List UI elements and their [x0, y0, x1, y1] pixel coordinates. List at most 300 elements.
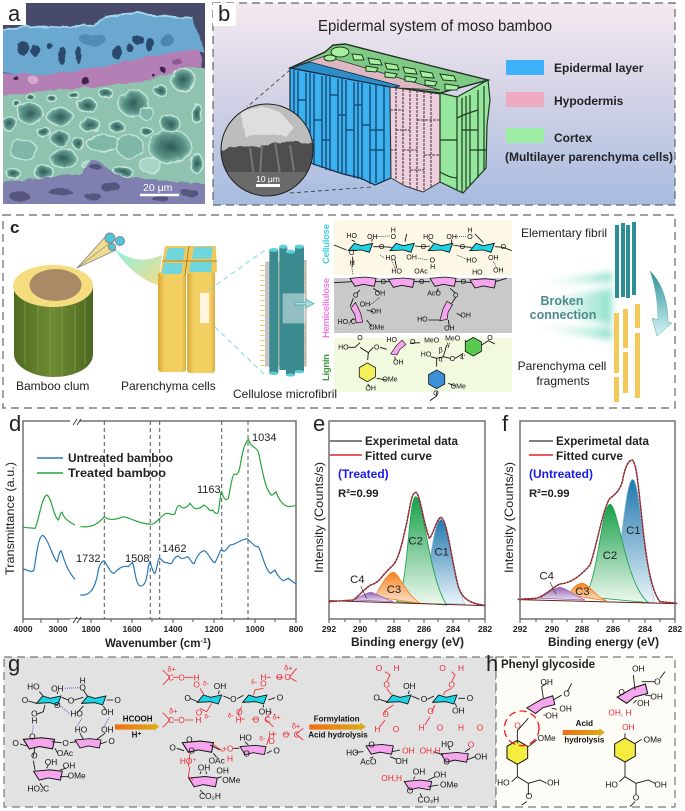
tick labels: 1600: [122, 624, 142, 634]
molecule: phenyl glycoside and cleaved products: HO: [605, 780, 618, 790]
cellulose microfibril: [262, 245, 314, 377]
peaks C1-C4: C3: [575, 586, 590, 598]
molecule: phenyl glycoside and cleaved products: HO: [497, 778, 510, 788]
molecule: activated intermediate: C: [168, 715, 174, 725]
panel b: epidermal system: [213, 1, 675, 205]
chemical structure: cellulose, hemicellulose, lignin: O: [381, 279, 387, 286]
molecule: activated intermediate: δ-: [259, 736, 265, 743]
molecule: starting polysaccharide: OH: [45, 757, 57, 767]
chemical structure: cellulose, hemicellulose, lignin: H: [350, 260, 355, 267]
y axis title: Intensity (Counts/s): [502, 462, 516, 573]
broken connection: connection: [530, 308, 596, 322]
label b: [213, 1, 236, 26]
broken connection: [515, 272, 612, 340]
tick labels: 3000: [48, 624, 68, 634]
chemical structure: cellulose, hemicellulose, lignin: O: [391, 234, 397, 241]
chemical structure: cellulose, hemicellulose, lignin: OH: [365, 385, 376, 392]
molecule: phenyl glycoside and cleaved products: O: [563, 689, 570, 699]
molecule: starting polysaccharide: O: [22, 695, 29, 705]
molecule: starting polysaccharide: O: [31, 709, 38, 719]
products: formylated cellulose and fragments: O: [383, 679, 390, 689]
products: formylated cellulose and fragments: O: [427, 706, 434, 716]
legend: [37, 451, 173, 480]
panel e: XPS treated: [312, 411, 492, 649]
label c: c: [10, 218, 19, 237]
products: formylated cellulose and fragments: O: [368, 740, 375, 750]
x axis title: ): [207, 638, 211, 650]
molecule: activated intermediate: [163, 664, 303, 801]
zoom lines: [209, 250, 265, 375]
chemical structure: cellulose, hemicellulose, lignin: OH: [446, 234, 457, 241]
molecule: activated intermediate: O: [276, 672, 283, 682]
peaks C1-C4: C2: [603, 550, 617, 562]
chemical structure: cellulose, hemicellulose, lignin: O: [374, 344, 380, 351]
tick labels: 1200: [204, 624, 224, 634]
chemical structure: cellulose, hemicellulose, lignin: O: [501, 244, 507, 251]
chemistry boxes: [334, 220, 512, 392]
scale bar: 10 um: 10 μm: [256, 174, 280, 184]
molecule: phenyl glycoside and cleaved products: OMe: [538, 733, 556, 743]
pink face: [390, 87, 440, 192]
molecule: phenyl glycoside and cleaved products: OH: [637, 698, 650, 708]
molecule: activated intermediate: O: [277, 692, 284, 702]
products: formylated cellulose and fragments: H: [419, 723, 425, 733]
x axis title: Binding energy (eV): [548, 635, 659, 649]
chemical structure: cellulose, hemicellulose, lignin: O: [461, 279, 467, 286]
molecule: activated intermediate: H: [260, 672, 266, 682]
legend: Fitted curve: [556, 449, 623, 463]
fragments label: [518, 359, 606, 388]
products: formylated cellulose and fragments: OH,H: [381, 773, 402, 783]
chemical structure: cellulose, hemicellulose, lignin: O: [433, 391, 439, 398]
chemical structure: cellulose, hemicellulose, lignin: O: [410, 339, 416, 346]
chemical structure: cellulose, hemicellulose, lignin: O: [353, 292, 359, 299]
chemical structure: cellulose, hemicellulose, lignin: O: [467, 234, 473, 241]
peaks C1-C4: C3: [387, 584, 401, 596]
chemical structure: cellulose, hemicellulose, lignin: β: [439, 348, 443, 355]
chemical structure: cellulose, hemicellulose, lignin: H: [391, 228, 396, 235]
legend: Treated bamboo: [68, 466, 166, 480]
molecule: activated intermediate: O: [283, 729, 290, 739]
chemical structure: cellulose, hemicellulose, lignin: OH: [393, 359, 404, 366]
products: formylated cellulose and fragments: OH,H: [420, 745, 440, 755]
curved arrow: [650, 271, 672, 336]
legend: hypodermis: [506, 92, 624, 108]
tick labels: 800: [289, 624, 303, 634]
molecule: phenyl glycoside and cleaved products: O: [514, 720, 521, 730]
chemical structure: cellulose, hemicellulose, lignin: O: [421, 244, 427, 251]
legend: Experimetal data: [556, 434, 649, 448]
molecule: activated intermediate: H: [269, 729, 275, 739]
molecule: starting polysaccharide: O: [79, 683, 86, 693]
scale bar: 10 um: [221, 104, 313, 196]
molecule: activated intermediate: δ-: [203, 680, 209, 687]
arrow: acid hydrolysis: hydrolysis: [564, 736, 605, 745]
molecule: starting polysaccharide: O: [29, 731, 36, 741]
tick labels: [13, 624, 303, 634]
tick labels: 288: [387, 624, 401, 634]
tick labels: 290: [353, 624, 367, 634]
vertical labels: Cellulose: [321, 224, 332, 264]
molecule: activated intermediate: O: [236, 707, 243, 717]
products: formylated cellulose and fragments: O: [468, 739, 475, 749]
tick labels: 4000: [13, 624, 33, 634]
chemical structure: cellulose, hemicellulose, lignin: O: [357, 335, 363, 342]
tick labels: 1000: [245, 624, 265, 634]
fragments label: fragments: [536, 374, 590, 388]
cell fragment bars: [614, 304, 640, 402]
products: formylated cellulose and fragments: O: [439, 663, 446, 673]
chemical structure: cellulose, hemicellulose, lignin: HO: [338, 344, 349, 351]
molecule: starting polysaccharide: OAc: [57, 748, 73, 758]
legend: Fitted curve: [365, 449, 432, 463]
peak labels: [76, 432, 276, 565]
peak labels: 1462: [162, 543, 186, 555]
molecule: activated intermediate: δ+: [167, 665, 176, 674]
molecule: activated intermediate: O: [230, 694, 237, 704]
arrow: acid hydrolysis: Acid: [576, 719, 593, 728]
arrow: formylation, acid hydrolysis: Formylation: [314, 715, 360, 724]
blue epidermal layer: [0, 13, 204, 77]
label f: f: [502, 411, 509, 436]
wedge from clum to cells: [115, 250, 162, 285]
parenchyma cells: [158, 246, 217, 373]
label d: d: [9, 411, 21, 436]
molecule: activated intermediate: +O: [222, 744, 234, 754]
chemical structure: cellulose, hemicellulose, lignin: HO₂C: [338, 319, 356, 326]
tick labels: 282: [478, 624, 492, 634]
chemical structure: cellulose, hemicellulose, lignin: γ: [447, 342, 451, 349]
peak labels: 1508: [125, 553, 149, 565]
tick labels: 284: [446, 624, 460, 634]
arrow: formylation, acid hydrolysis: [308, 715, 368, 740]
molecule: starting polysaccharide: HO₂C: [27, 784, 49, 794]
chemical structure: cellulose, hemicellulose, lignin: OMe: [369, 324, 384, 331]
molecule: activated intermediate: H: [195, 715, 201, 725]
products: formylated cellulose and fragments: O: [376, 663, 383, 673]
scale bar: 20 um: [140, 182, 179, 195]
chemical structure: cellulose, hemicellulose, lignin: HO: [386, 337, 397, 344]
molecule: activated intermediate: O: [243, 749, 250, 759]
chemical structure: cellulose, hemicellulose, lignin: OH: [493, 267, 504, 274]
molecule: activated intermediate: CO₂H: [199, 791, 221, 801]
peaks C1-C4: C1: [434, 546, 449, 558]
molecule: activated intermediate: OH: [198, 763, 210, 773]
legend: cortex: Cortex: [554, 131, 592, 145]
molecule: starting polysaccharide: HO: [70, 709, 83, 719]
blue face: [290, 68, 391, 185]
panel g: reaction mechanism: [4, 651, 496, 807]
molecule: starting polysaccharide: O: [12, 738, 19, 748]
molecule: activated intermediate: HO: [239, 733, 252, 743]
peak labels: 1163: [197, 484, 221, 496]
chemical structure: cellulose, hemicellulose, lignin: OAc: [414, 268, 428, 275]
molecule: starting polysaccharide: O: [114, 695, 121, 705]
chemical structure: cellulose, hemicellulose, lignin: H: [467, 228, 473, 235]
chemical structure: cellulose, hemicellulose, lignin: O: [453, 292, 459, 299]
products: formylated cellulose and fragments: O: [448, 679, 455, 689]
molecule: starting polysaccharide: OH: [101, 707, 114, 717]
molecule: activated intermediate: δ+: [292, 721, 300, 730]
products: formylated cellulose and fragments: CO₂H: [417, 795, 439, 805]
arrow: HCOOH H+: H⁺: [132, 731, 142, 740]
chemical structure: cellulose, hemicellulose, lignin: OMe: [451, 383, 466, 390]
vertical labels: [321, 224, 332, 381]
panel d: FTIR chart: [3, 411, 303, 650]
molecule: activated intermediate: C: [168, 673, 174, 683]
molecule: activated intermediate: OH: [216, 765, 229, 775]
molecule: starting polysaccharide: OH: [51, 683, 64, 693]
molecule: activated intermediate: C: [294, 729, 300, 739]
legend: epidermal layer: [506, 60, 644, 75]
tick labels: 290: [545, 624, 559, 634]
chemical structure: cellulose, hemicellulose, lignin: 4': [460, 354, 465, 361]
molecule: activated intermediate: O: [273, 745, 280, 755]
molecule: phenyl glycoside and cleaved products: OH: [547, 778, 560, 788]
arrow: formylation, acid hydrolysis: Acid hydrolysis: [308, 731, 368, 740]
labels of structures: Cellulose microfibril: [233, 387, 337, 401]
molecule: starting polysaccharide: O: [62, 738, 69, 748]
products: formylated cellulose and fragments: HO: [346, 747, 359, 757]
molecule: activated intermediate: OAc: [209, 755, 225, 765]
label a: [3, 1, 26, 26]
labels of structures: Parenchyma cells: [121, 379, 216, 393]
legend: epidermal layer: Epidermal layer: [554, 61, 644, 75]
peaks C1-C4: C2: [408, 536, 423, 548]
axes: [23, 419, 296, 623]
molecule: starting polysaccharide: O: [108, 736, 115, 746]
molecule: starting polysaccharide: O: [68, 695, 75, 705]
molecule: starting polysaccharide: O: [54, 700, 61, 710]
molecule: activated intermediate: C: [284, 672, 290, 682]
molecule: starting polysaccharide: O: [31, 751, 38, 761]
chemical structure: cellulose, hemicellulose, lignin: O: [419, 279, 425, 286]
chemical structure: cellulose, hemicellulose, lignin: H: [430, 264, 435, 271]
label b: b: [218, 1, 230, 26]
arrow: acid hydrolysis: [563, 719, 605, 745]
chemical structure: cellulose, hemicellulose, lignin: O: [450, 356, 456, 363]
chemical structure: cellulose, hemicellulose, lignin: O: [430, 258, 436, 265]
products: formylated cellulose and fragments: O: [373, 692, 380, 702]
legend: cortex: (Multilayer parenchyma cells): [505, 150, 673, 164]
molecule: phenyl glycoside and cleaved products: OH: [540, 677, 553, 687]
products: formylated cellulose and fragments: O: [382, 709, 389, 719]
molecule: activated intermediate: C: [264, 714, 270, 724]
molecule: activated intermediate: O: [188, 745, 195, 755]
products: formylated cellulose and fragments: O: [477, 723, 484, 733]
molecule: phenyl glycoside and cleaved products: OH: [559, 704, 572, 714]
products: formylated cellulose and fragments: H: [394, 663, 400, 673]
molecule: phenyl glycoside and cleaved products: O: [618, 687, 625, 697]
panel h: phenyl glycoside: [486, 651, 675, 807]
chemical structure: cellulose, hemicellulose, lignin: HO: [346, 233, 357, 240]
molecule: activated intermediate: O: [193, 679, 200, 689]
chemical structure: cellulose, hemicellulose, lignin: HO: [417, 316, 428, 323]
products: formylated cellulose and fragments: AcO: [360, 756, 377, 766]
peaks C1-C4: C1: [626, 525, 641, 537]
panel a: SEM cross-section: [0, 3, 208, 208]
products: formylated cellulose and fragments: OH: [395, 756, 408, 766]
products: formylated cellulose and fragments: H: [374, 724, 380, 734]
pink hypodermis layer: [0, 49, 202, 97]
peak labels: 1732: [76, 553, 100, 565]
chemical structure: cellulose, hemicellulose, lignin: O: [379, 244, 385, 251]
molecule: phenyl glycoside and cleaved products: O: [526, 791, 533, 801]
tick labels: [513, 624, 682, 634]
chemical structure: cellulose, hemicellulose, lignin: HO: [385, 255, 396, 262]
chemical structure: cellulose, hemicellulose, lignin: OH: [371, 309, 381, 316]
molecule: starting polysaccharide: HO: [75, 725, 88, 735]
scale bar: 20 um: 20 μm: [143, 182, 173, 194]
molecule: phenyl glycoside and cleaved products: [497, 664, 667, 807]
molecule: phenyl glycoside and cleaved products: OH: [632, 664, 645, 674]
x axis title: Binding energy (eV): [351, 635, 464, 649]
molecule: phenyl glycoside and cleaved products: OH: [545, 711, 558, 721]
peaks C1-C4: [329, 492, 485, 606]
chemical structure: cellulose, hemicellulose, lignin: HO: [466, 258, 477, 265]
chemical structure: cellulose, hemicellulose, lignin: HO: [472, 269, 483, 276]
tick labels: 1400: [163, 624, 183, 634]
molecule: activated intermediate: OH: [214, 681, 226, 691]
molecule: activated intermediate: δ+: [272, 712, 281, 721]
zoom dashes: [247, 70, 372, 193]
green face: [440, 80, 490, 193]
legend: [529, 434, 649, 500]
frame: [520, 421, 675, 623]
chemical structure: cellulose, hemicellulose, lignin: OH: [488, 255, 499, 262]
molecule: starting polysaccharide: OH: [63, 760, 75, 770]
molecule: activated intermediate: O: [186, 735, 193, 745]
molecule: activated intermediate: δ-: [228, 712, 234, 719]
legend: Untreated bamboo: [68, 451, 173, 465]
products: formylated cellulose and fragments: O: [443, 756, 450, 766]
molecule: activated intermediate: δ+: [169, 706, 178, 715]
tick labels: 292: [322, 624, 336, 634]
chemical structure: cellulose, hemicellulose, lignin: OH: [460, 313, 471, 320]
tick labels: 292: [513, 624, 527, 634]
label e: e: [313, 411, 325, 436]
molecule: activated intermediate: HO⁺: [180, 756, 197, 766]
molecule: activated intermediate: δ-: [251, 679, 257, 686]
spectrum: treated bamboo: [23, 439, 296, 528]
chemical structure: cellulose, hemicellulose, lignin: AcO: [427, 291, 441, 298]
peaks C1-C4: C4: [539, 571, 554, 583]
legend: cortex: [505, 128, 673, 164]
molecule: phenyl glycoside and cleaved products: OH, H: [608, 708, 632, 718]
legend: Experimetal data: [365, 434, 458, 448]
green cortex layer: [0, 64, 208, 188]
elementary fibril bars: [615, 222, 636, 298]
molecule: starting polysaccharide: [12, 675, 121, 794]
products: formylated cellulose and fragments: OH: [434, 770, 446, 780]
chemical structure: cellulose, hemicellulose, lignin: OH: [444, 325, 455, 332]
title: Epidermal system of moso bamboo: [318, 18, 552, 35]
label a: a: [8, 1, 21, 26]
molecule: activated intermediate: O: [178, 715, 185, 725]
molecule: activated intermediate: H: [194, 673, 200, 683]
products: formylated cellulose and fragments: H: [458, 663, 464, 673]
labels of structures: [16, 379, 337, 401]
molecule: activated intermediate: O: [260, 679, 267, 689]
molecule: phenyl glycoside and cleaved products: O: [654, 676, 661, 686]
dashed reference lines: [104, 421, 248, 619]
elementary fibril label: Elementary fibril: [521, 226, 607, 240]
molecule: phenyl glycoside and cleaved products: OMe: [644, 735, 662, 745]
bamboo clum: [13, 265, 93, 377]
legend: [330, 434, 458, 500]
chemical structure: cellulose, hemicellulose, lignin: O: [349, 250, 355, 257]
chemical structure: cellulose, hemicellulose, lignin: O: [460, 244, 466, 251]
peak labels: 1034: [252, 432, 276, 444]
legend: R²=0.99: [338, 488, 379, 500]
chemical structure: cellulose, hemicellulose, lignin: OH: [406, 254, 417, 261]
molecule: activated intermediate: O: [169, 743, 176, 753]
chemical structure: cellulose, hemicellulose, lignin: OH: [375, 291, 385, 298]
y axis title: Transmittance (a.u.): [3, 462, 17, 575]
molecule: activated intermediate: OH: [259, 706, 271, 716]
molecule: activated intermediate: O: [184, 693, 191, 703]
panel c: hierarchical structure: [3, 215, 675, 408]
molecule: activated intermediate: O: [196, 707, 203, 717]
tick labels: [322, 624, 492, 634]
legend: (Untreated): [529, 467, 593, 481]
legend: (Treated): [338, 467, 389, 481]
arrow: HCOOH H+: [115, 715, 159, 740]
chemical structure: cellulose, hemicellulose, lignin: HO: [423, 234, 434, 241]
3D block: [290, 44, 490, 193]
chemical structure: cellulose, hemicellulose, lignin: HO: [391, 268, 402, 275]
products: formylated cellulose and fragments: OMe: [440, 780, 458, 790]
labels of structures: Bamboo clum: [16, 379, 89, 393]
products: formylated cellulose and fragments: O: [407, 785, 414, 795]
products: formylated cellulose and fragments: H: [458, 723, 464, 733]
chemical structure: cellulose, hemicellulose, lignin: OMe: [382, 376, 398, 383]
chemical structure: cellulose, hemicellulose, lignin: α: [439, 357, 443, 364]
products: formylated cellulose and fragments: O: [437, 723, 444, 733]
broken connection: Broken: [540, 294, 584, 308]
molecule: starting polysaccharide: HO: [27, 681, 40, 691]
chemical structure: cellulose, hemicellulose, lignin: HO: [421, 351, 432, 358]
chemical structure: cellulose, hemicellulose, lignin: MeO: [445, 335, 461, 342]
products: formylated cellulose and fragments: O: [393, 724, 400, 734]
products: formylated cellulose and fragments: OH: [452, 705, 465, 715]
spectrum: untreated bamboo: [23, 535, 296, 595]
molecule: starting polysaccharide: H: [80, 675, 86, 685]
tick labels: 1800: [81, 624, 101, 634]
x axis title: -1: [200, 636, 207, 645]
chemical structure: cellulose, hemicellulose, lignin: O: [487, 335, 493, 342]
molecule: activated intermediate: O: [268, 736, 275, 746]
y axis title: Intensity (Counts/s): [312, 462, 326, 573]
tick labels: 286: [606, 624, 620, 634]
products: formylated cellulose and fragments: [346, 663, 487, 805]
title: Phenyl glycoside: [501, 657, 595, 671]
molecule: phenyl glycoside and cleaved products: OH: [650, 691, 663, 701]
label g: g: [8, 651, 20, 676]
molecule: activated intermediate: O: [253, 714, 260, 724]
molecule: activated intermediate: OMe: [222, 775, 241, 785]
products: formylated cellulose and fragments: OH: [475, 751, 487, 761]
products: formylated cellulose and fragments: OH: [403, 681, 416, 691]
products: formylated cellulose and fragments: O: [467, 693, 474, 703]
peaks C1-C4: [518, 460, 677, 604]
molecule: activated intermediate: δ+: [284, 664, 293, 673]
molecule: starting polysaccharide: OH: [101, 725, 114, 735]
legend: hypodermis: Hypodermis: [554, 94, 624, 108]
products: formylated cellulose and fragments: OH: [402, 745, 415, 755]
top surface: [290, 44, 488, 93]
chemical structure: cellulose, hemicellulose, lignin: MeO: [424, 337, 440, 344]
